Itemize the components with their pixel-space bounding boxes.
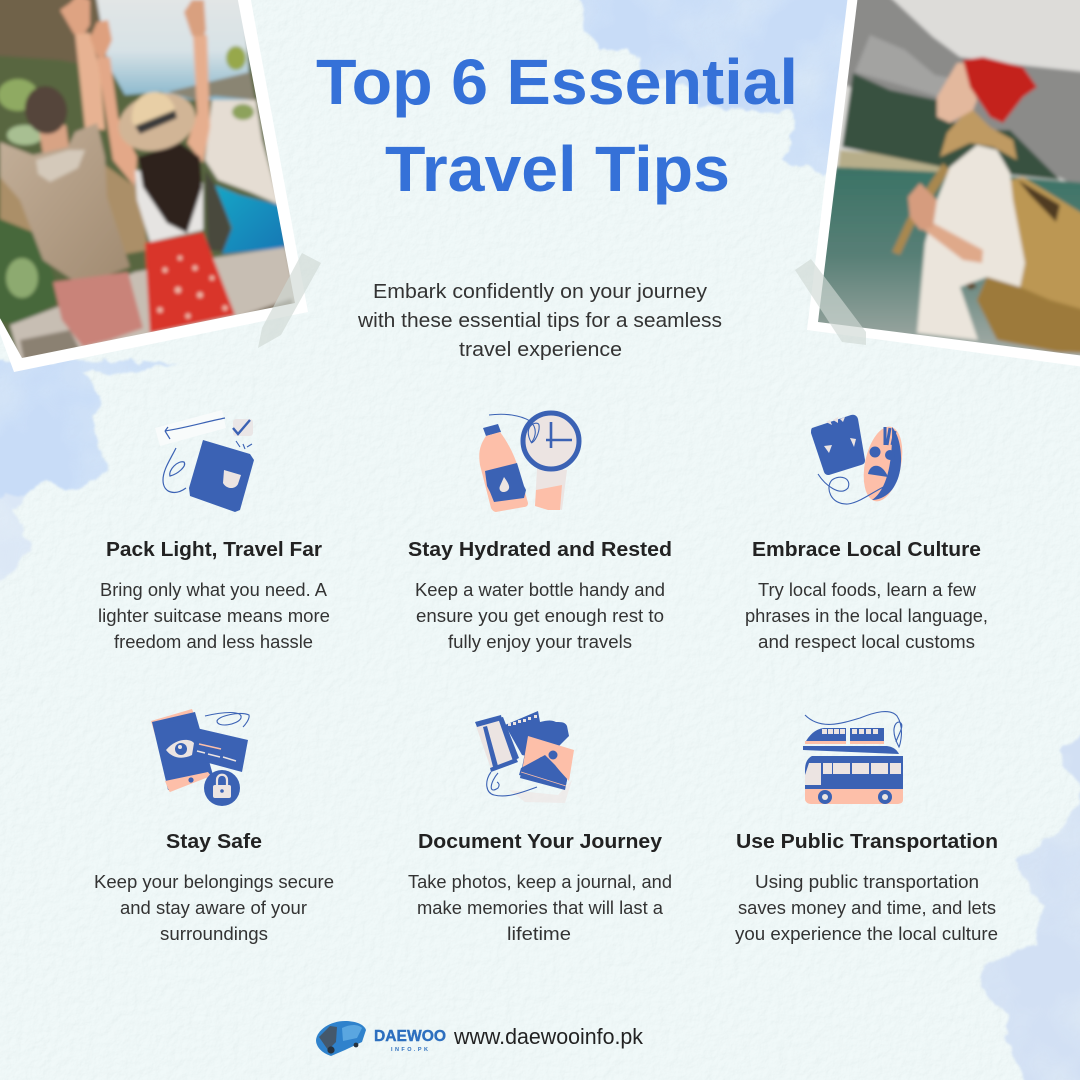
description: ensure you get enough rest to <box>416 606 664 626</box>
description <box>94 872 334 944</box>
icon: masks <box>811 415 909 505</box>
tape strip left <box>258 253 321 348</box>
description: fully enjoy your travels <box>448 632 632 652</box>
icon: suitcase with check <box>155 410 254 512</box>
description: saves money and time, and lets <box>738 898 996 918</box>
icon: train and bus <box>803 712 903 804</box>
footer logo and website <box>316 1021 644 1056</box>
tip: public transportation <box>735 712 998 944</box>
tip: document journey <box>408 711 672 944</box>
backpack <box>1009 175 1080 311</box>
arm and hand <box>920 223 983 263</box>
description: Using public transportation <box>755 872 979 892</box>
photo: woman with red hat and backpack <box>807 0 1080 367</box>
description: Try local foods, learn a few <box>758 580 977 600</box>
hair <box>940 107 1017 160</box>
woman <box>97 57 137 187</box>
tape strip right <box>795 259 866 345</box>
logo wordmark: DAEWOO <box>374 1028 446 1045</box>
description <box>735 872 998 944</box>
intro text <box>357 281 722 361</box>
description: Keep your belongings secure <box>94 872 334 892</box>
description: lifetime <box>507 924 571 944</box>
heading: Embrace Local Culture <box>752 539 981 561</box>
photo frame <box>807 0 1080 367</box>
hat <box>963 57 1037 123</box>
heading: Use Public Transportation <box>736 831 998 853</box>
photo: couple with raised arms <box>0 0 310 372</box>
description: Keep a water bottle handy and <box>415 580 665 600</box>
intro text: with these essential tips for a seamless <box>357 310 722 332</box>
description <box>98 580 330 652</box>
icon: bus logo <box>316 1021 366 1056</box>
icon: phone, card and lock <box>151 709 249 806</box>
description: you experience the local culture <box>735 924 998 944</box>
sweater <box>917 145 1025 340</box>
description: phrases in the local language, <box>745 606 988 626</box>
icon: film roll and photo <box>475 711 574 803</box>
description <box>745 580 988 652</box>
description <box>415 580 665 652</box>
man <box>75 33 105 130</box>
heading: Stay Safe <box>166 831 262 853</box>
head <box>937 63 977 123</box>
description: and stay aware of your <box>120 898 307 918</box>
description: surroundings <box>160 924 268 944</box>
title <box>316 46 798 205</box>
description: Bring only what you need. A <box>100 580 327 600</box>
tip: hydrated <box>408 413 672 652</box>
tip: local culture <box>745 415 988 652</box>
icon: water bottle and clock <box>479 413 579 512</box>
description: lighter suitcase means more <box>98 606 330 626</box>
logo wordmark <box>374 1028 446 1053</box>
title: Top 6 Essential <box>316 46 798 118</box>
photo frame <box>0 0 308 372</box>
heading: Stay Hydrated and Rested <box>408 539 672 561</box>
logo wordmark: INFO.PK <box>391 1047 428 1053</box>
heading: Document Your Journey <box>418 831 663 853</box>
description: and respect local customs <box>758 632 975 652</box>
strap <box>892 163 950 255</box>
intro text: Embark confidently on your journey <box>373 281 707 303</box>
description: Take photos, keep a journal, and <box>408 872 672 892</box>
tip: stay safe <box>94 709 334 944</box>
heading: Pack Light, Travel Far <box>106 539 322 561</box>
description <box>408 872 672 944</box>
intro text: travel experience <box>459 339 622 361</box>
tip: pack light <box>98 410 330 652</box>
website: www.daewooinfo.pk <box>453 1024 644 1049</box>
description: make memories that will last a <box>417 898 664 918</box>
description: freedom and less hassle <box>114 632 313 652</box>
title: Travel Tips <box>385 133 730 205</box>
